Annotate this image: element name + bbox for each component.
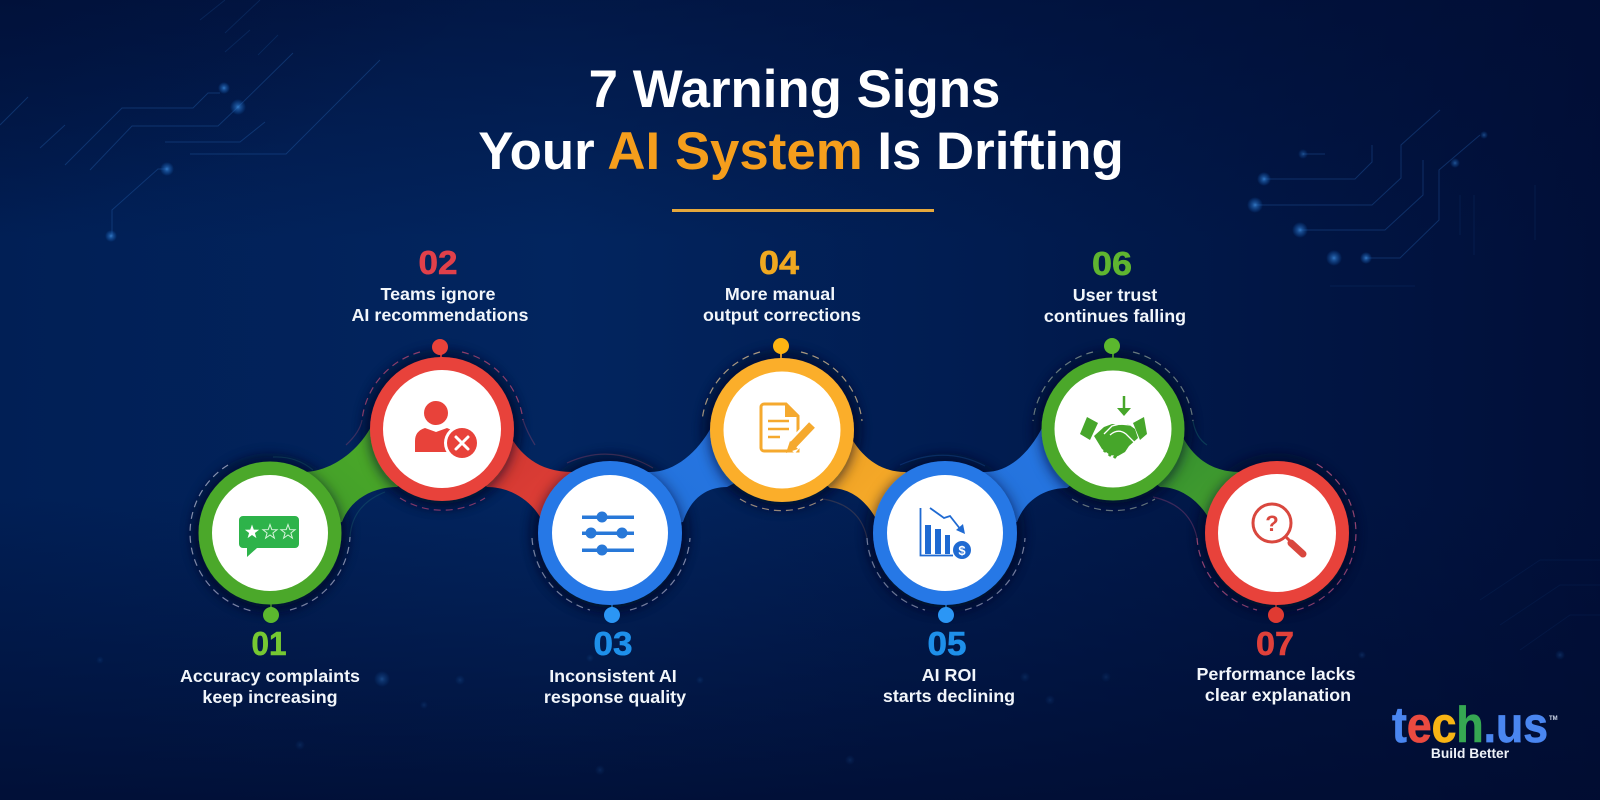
description 03: Inconsistent AI bbox=[549, 666, 677, 686]
connector: 05 to 06 bbox=[975, 426, 1090, 530]
number 02: 02 bbox=[418, 244, 458, 281]
description 02: Teams ignore bbox=[380, 284, 496, 304]
icon: magnifier with question mark: ? bbox=[1265, 511, 1279, 536]
panel: sign 04 bbox=[703, 244, 861, 502]
logo: tech.us: tech.us bbox=[1392, 697, 1548, 753]
icon: speech bubble with one of three stars bbox=[239, 516, 299, 557]
node ring bbox=[1042, 358, 1184, 500]
marker dot bbox=[263, 607, 279, 623]
number 04: 04 bbox=[759, 244, 800, 281]
icon: falling bar chart with dollar: $ bbox=[958, 543, 966, 558]
icon: falling bar chart with dollar bbox=[920, 508, 971, 559]
marker dot bbox=[1268, 607, 1284, 623]
description 02: AI recommendations bbox=[352, 305, 529, 325]
node ring bbox=[198, 462, 342, 604]
node ring bbox=[710, 358, 854, 502]
panel: sign 01 bbox=[180, 462, 360, 707]
logo: tech.us: TM bbox=[1549, 716, 1558, 722]
description 06: continues falling bbox=[1044, 306, 1186, 326]
description 07: clear explanation bbox=[1205, 685, 1351, 705]
panel: sign 06 bbox=[1042, 245, 1186, 500]
marker dot bbox=[938, 607, 954, 623]
marker dot bbox=[432, 339, 448, 355]
icon: document with pencil bbox=[761, 404, 812, 453]
marker dot bbox=[604, 607, 620, 623]
connector: 04 to 05 bbox=[810, 425, 925, 530]
title: Your AI System Is Drifting bbox=[478, 122, 1124, 181]
connector: 06 to 07 bbox=[1140, 425, 1260, 530]
description 01: keep increasing bbox=[202, 687, 338, 707]
icon: sliders bbox=[582, 512, 634, 556]
logo: tech.us: Build Better bbox=[1431, 746, 1510, 761]
icon: user with cross bbox=[415, 401, 480, 461]
panel: sign 03 bbox=[538, 461, 686, 707]
description 04: output corrections bbox=[703, 305, 861, 325]
description 05: AI ROI bbox=[922, 665, 976, 685]
dashed orbit rings bbox=[190, 352, 1356, 611]
node ring bbox=[1205, 461, 1349, 605]
title bbox=[478, 60, 1124, 181]
connector: 03 to 04 bbox=[640, 426, 760, 530]
node ring bbox=[873, 461, 1017, 605]
number 05: 05 bbox=[928, 625, 966, 662]
description 04: More manual bbox=[725, 284, 835, 304]
number 06: 06 bbox=[1092, 245, 1132, 282]
title: 7 Warning Signs bbox=[589, 60, 1000, 119]
panel: sign 02 bbox=[352, 244, 529, 501]
description 06: User trust bbox=[1073, 285, 1157, 305]
icon: handshake with down arrow bbox=[1080, 396, 1147, 458]
panel: sign 07 bbox=[1196, 461, 1356, 705]
number 07: 07 bbox=[1256, 625, 1294, 662]
node ring bbox=[538, 461, 682, 605]
icon: magnifier with question mark bbox=[1253, 504, 1303, 554]
panel: sign 05 bbox=[873, 461, 1017, 706]
description 01: Accuracy complaints bbox=[180, 666, 360, 686]
node ring bbox=[370, 357, 514, 501]
description 03: response quality bbox=[544, 687, 686, 707]
description 05: starts declining bbox=[883, 686, 1015, 706]
number 03: 03 bbox=[594, 625, 632, 662]
number 01: 01 bbox=[252, 625, 286, 662]
title underline bbox=[672, 209, 934, 212]
marker dot bbox=[773, 338, 789, 354]
connector: 01 to 02 bbox=[295, 425, 420, 530]
connector: 02 to 03 bbox=[470, 425, 590, 530]
marker dot bbox=[1104, 338, 1120, 354]
description 07: Performance lacks bbox=[1196, 664, 1356, 684]
